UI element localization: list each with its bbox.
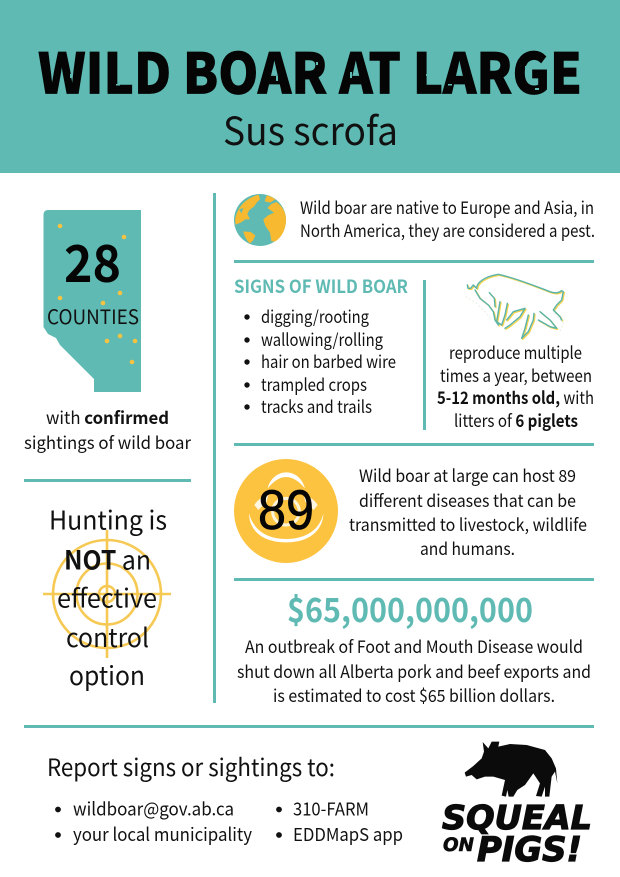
panel: reproduction: times a year, between xyxy=(440,362,592,387)
signs list: wallowing/rolling xyxy=(261,326,383,351)
hunting message xyxy=(49,500,167,693)
signs list xyxy=(244,303,396,418)
reproduction text: reproduce multiple xyxy=(449,339,582,364)
hunting message: Hunting is xyxy=(49,500,167,538)
panel: outbreak cost: is estimated to cost $65 billion dollars. xyxy=(273,682,555,707)
report contacts xyxy=(55,796,403,847)
icon: boar silhouette xyxy=(465,742,557,797)
hunting message: option xyxy=(69,656,145,693)
header banner xyxy=(0,0,620,173)
subtitle: Sus scrofa xyxy=(223,101,398,157)
report contacts: EDDMapS app xyxy=(293,821,403,847)
signs heading: SIGNS OF WILD BOAR xyxy=(234,273,408,299)
panel: reproduction: 5-12 months old, with xyxy=(437,384,594,409)
report contacts: wildboar@gov.ab.ca xyxy=(73,796,234,822)
panel: outbreak cost xyxy=(237,584,591,707)
icon: globe xyxy=(234,194,286,246)
icon: biohazard disc xyxy=(234,459,338,563)
panel: hunting xyxy=(43,500,171,693)
logo: squeal on pigs: PIGS! xyxy=(477,830,582,870)
panel: signs of wild boar xyxy=(234,273,408,418)
sightings caption: with confirmed xyxy=(46,404,169,429)
sighting dots xyxy=(58,224,137,364)
report heading: Report signs or sightings to: xyxy=(47,748,335,783)
panel: outbreak cost: shut down all Alberta pork and beef exports and xyxy=(237,658,591,683)
signs list: digging/rooting xyxy=(261,303,369,328)
hunting message: NOT an xyxy=(64,540,151,578)
disease text: Wild boar at large can host 89 xyxy=(359,462,576,487)
logo wordmark: SQUEAL xyxy=(442,798,592,837)
vertical divider xyxy=(213,193,216,703)
panel: native range xyxy=(234,194,595,246)
panel: diseases: and humans. xyxy=(420,535,515,560)
report contacts: your local municipality xyxy=(73,821,253,847)
disease count: 89 xyxy=(258,478,314,541)
cost figure: $65,000,000,000 xyxy=(287,584,533,632)
title: WILD BOAR AT LARGE xyxy=(38,30,582,110)
panel: reproduction: litters of 6 piglets xyxy=(454,407,578,432)
report contacts: 310-FARM xyxy=(293,796,369,822)
panel: diseases xyxy=(234,459,587,563)
panel: diseases: different diseases that can be xyxy=(359,487,576,512)
icon: sow with piglets xyxy=(466,274,564,339)
panel: reproduction xyxy=(437,274,594,432)
signs list: trampled crops xyxy=(261,371,367,396)
icon: target crosshair xyxy=(43,530,171,658)
county count: 28 xyxy=(64,223,121,297)
hunting message: effective xyxy=(57,578,157,616)
logo: squeal on pigs: ON xyxy=(443,834,474,856)
counties label: COUNTIES xyxy=(47,301,139,330)
panel: diseases: transmitted to livestock, wildlife xyxy=(349,511,587,536)
signs list: tracks and trails xyxy=(261,393,372,418)
sightings caption line 2: sightings of wild boar xyxy=(24,429,191,454)
hunting message: control xyxy=(66,618,149,655)
signs list: hair on barbed wire xyxy=(261,348,396,373)
cost text: An outbreak of Foot and Mouth Disease would xyxy=(245,633,583,658)
panel: counties map xyxy=(44,210,169,429)
panel: report xyxy=(47,748,403,847)
map of Alberta xyxy=(44,210,141,392)
logo: squeal on pigs xyxy=(442,742,592,870)
